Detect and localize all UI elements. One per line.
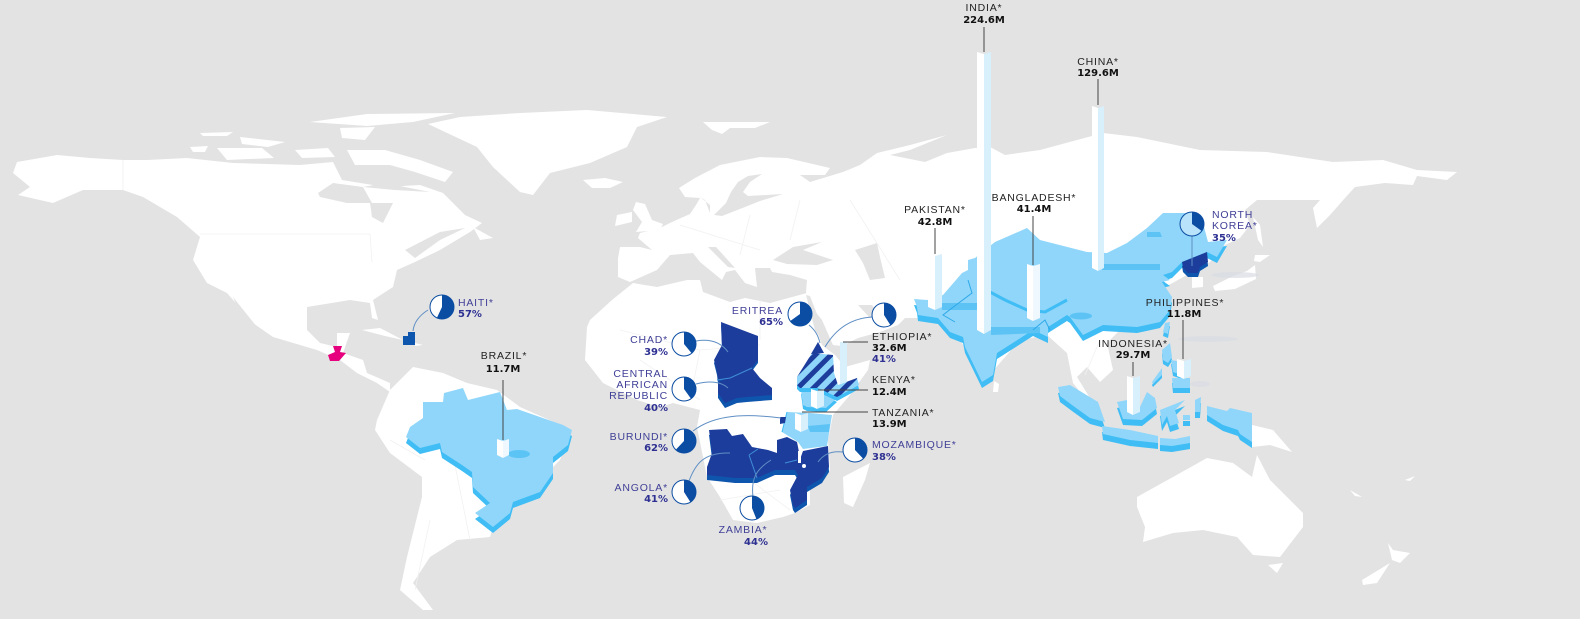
label: Kenya: 12.4M xyxy=(872,387,907,398)
label: Brazil: 11.7M xyxy=(486,364,520,375)
pie: Haiti xyxy=(430,295,454,319)
label: Angola: 41% xyxy=(644,494,668,505)
label: Bangladesh: BANGLADESH* xyxy=(992,192,1076,204)
label: China: 129.6M xyxy=(1077,68,1119,79)
bar: China xyxy=(1092,79,1104,271)
pie: Zambia xyxy=(740,496,764,520)
label: North Korea: KOREA* xyxy=(1212,220,1258,232)
label: North Korea: NORTH xyxy=(1212,209,1253,221)
faint borders xyxy=(123,160,1100,590)
island: Iceland xyxy=(583,178,623,188)
label: Central African Republic xyxy=(609,368,668,414)
label: China xyxy=(1077,56,1119,79)
country: Central African Republic xyxy=(717,368,772,408)
pie: Chad xyxy=(672,332,696,356)
label: Tanzania: 13.9M xyxy=(872,419,907,430)
sea: Red Sea xyxy=(806,295,833,345)
countries: Angola, Zambia, Mozambique xyxy=(707,429,829,513)
country: Eritrea xyxy=(811,342,824,354)
label: Chad xyxy=(630,334,668,358)
label: Burundi: BURUNDI* xyxy=(610,431,668,443)
label: Indonesia xyxy=(1098,338,1168,361)
pie: Burundi xyxy=(672,429,696,453)
label: Brazil xyxy=(481,350,527,375)
label: Bangladesh: 41.4M xyxy=(1017,204,1051,215)
pie: Ethiopia xyxy=(872,303,896,327)
label: Ethiopia: ETHIOPIA* xyxy=(872,331,932,343)
continent: South America xyxy=(375,367,572,610)
label: Kenya: KENYA* xyxy=(872,374,916,386)
Sakhalin xyxy=(1253,217,1263,247)
continent: Australia xyxy=(1137,455,1303,557)
label: Central African Republic: REPUBLIC xyxy=(609,390,668,402)
islands: New Zealand xyxy=(1350,476,1415,585)
sea: Hudson Bay and Gulf details xyxy=(233,183,465,327)
island: Japan xyxy=(1213,255,1270,291)
country: Kenya xyxy=(801,388,837,412)
island: Great Britain xyxy=(633,202,663,232)
label: Philippines: 11.8M xyxy=(1167,309,1201,320)
label: Angola: ANGOLA* xyxy=(615,482,668,494)
island: Tasmania xyxy=(1268,563,1283,573)
continent: Africa xyxy=(585,280,870,523)
label: Central African Republic: CENTRAL xyxy=(613,368,668,380)
label: Burundi: 62% xyxy=(644,443,668,454)
label: Pakistan: PAKISTAN* xyxy=(904,204,966,216)
label: Pakistan xyxy=(904,204,966,228)
label: China: CHINA* xyxy=(1077,56,1119,68)
continent: Greenland xyxy=(428,110,667,195)
label: Ethiopia xyxy=(872,331,932,365)
label: Mozambique: MOZAMBIQUE* xyxy=(872,439,957,451)
country: Chad xyxy=(714,322,758,383)
label: Mozambique: 38% xyxy=(872,452,896,463)
continent: Eurasia xyxy=(618,133,1457,403)
label: Eritrea: ERITREA xyxy=(732,305,783,317)
country: Haiti xyxy=(403,332,415,345)
label: Ethiopia: 32.6M xyxy=(872,343,907,354)
countries: Indonesia and Philippines (highlighted) xyxy=(1058,322,1252,452)
South Korea xyxy=(1192,277,1203,288)
country: North Korea xyxy=(1182,252,1208,277)
label: Pakistan: 42.8M xyxy=(918,217,952,228)
pie: Mozambique xyxy=(843,438,867,462)
label: Zambia xyxy=(719,524,768,548)
country: Ethiopia (striped) xyxy=(797,353,859,401)
label: Mozambique xyxy=(872,439,957,463)
label: Chad: 39% xyxy=(644,347,668,358)
island: Madagascar xyxy=(843,463,870,507)
label: Philippines xyxy=(1146,297,1224,320)
label: North Korea: 35% xyxy=(1212,233,1236,244)
pie: North Korea xyxy=(1180,212,1204,236)
countries: South Asia and China (highlighted) xyxy=(914,213,1227,388)
continent: North America xyxy=(13,113,493,392)
bar: Kenya xyxy=(811,389,868,409)
bar: India xyxy=(977,27,991,334)
label: Indonesia: 29.7M xyxy=(1116,350,1150,361)
leader lines from pies to countries xyxy=(413,236,1192,497)
bar: Ethiopia xyxy=(840,342,868,384)
label: Burundi xyxy=(610,431,668,454)
label: Kenya xyxy=(872,374,916,398)
label: Zambia: 44% xyxy=(744,537,768,548)
island: Sri Lanka xyxy=(993,381,999,392)
label: Tanzania xyxy=(872,407,934,430)
bar: Brazil xyxy=(497,380,509,458)
bar: Bangladesh xyxy=(1027,216,1040,321)
faint sea shadows xyxy=(1178,272,1259,387)
country: Tanzania xyxy=(782,412,832,449)
bar: Indonesia xyxy=(1127,362,1140,415)
label: Eritrea: 65% xyxy=(759,317,783,328)
country: Burundi xyxy=(780,417,786,424)
label: Zambia: ZAMBIA* xyxy=(719,524,767,536)
bar: Pakistan xyxy=(928,228,942,310)
label: Haiti: 57% xyxy=(458,309,482,320)
bar: Philippines xyxy=(1177,320,1191,379)
label: India: 224.6M xyxy=(963,15,1005,26)
label: Indonesia: INDONESIA* xyxy=(1098,338,1168,350)
pie: Angola xyxy=(672,480,696,504)
pie: Central African Republic xyxy=(672,377,696,401)
label: Eritrea xyxy=(732,305,783,328)
seas inside Eurasia xyxy=(700,174,885,318)
country: Brazil (highlighted) xyxy=(406,388,572,533)
label: Chad: CHAD* xyxy=(630,334,668,346)
label: Haiti: HAITI* xyxy=(458,297,494,309)
island: Papua New Guinea xyxy=(1252,425,1292,452)
label: India xyxy=(963,2,1005,26)
label: Central African Republic: 40% xyxy=(644,403,668,414)
pie: Eritrea xyxy=(788,302,812,326)
label: Ethiopia: 41% xyxy=(872,354,896,365)
country: Guatemala xyxy=(328,346,346,361)
world base map xyxy=(13,110,1457,610)
bar: Tanzania xyxy=(795,412,868,432)
label: Central African Republic: AFRICAN xyxy=(616,379,668,391)
label: Tanzania: TANZANIA* xyxy=(872,407,934,419)
label: Haiti xyxy=(458,297,494,320)
label: India: INDIA* xyxy=(966,2,1002,14)
label: Brazil: BRAZIL* xyxy=(481,350,527,362)
label: Bangladesh xyxy=(992,192,1076,215)
label: Philippines: PHILIPPINES* xyxy=(1146,297,1224,309)
label: Angola xyxy=(615,482,668,505)
island: Svalbard xyxy=(703,122,770,134)
island: Ireland xyxy=(615,212,632,226)
label: North Korea xyxy=(1212,209,1258,244)
